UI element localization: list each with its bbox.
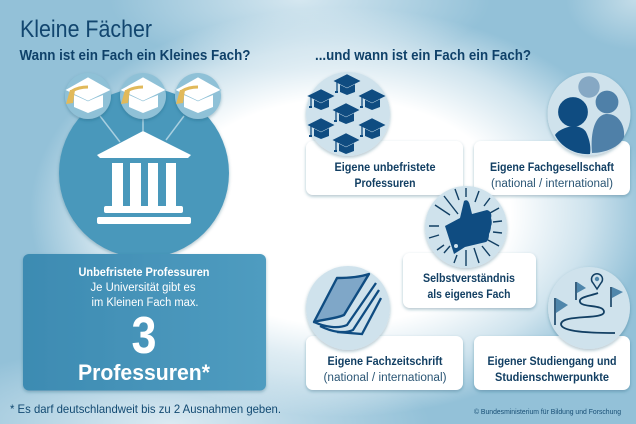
card: Eigene Fachgesellschaft	[474, 141, 630, 195]
card: Eigene Fachzeitschrift	[306, 336, 463, 390]
icon: university building	[97, 131, 191, 224]
icon: graduation cap 3	[175, 73, 221, 119]
panel: professorships box: Je Universität gibt es	[90, 282, 196, 294]
icon: thumbs up with rays	[425, 186, 507, 268]
heading: right question: ...und wann ist ein Fach ein Fach?	[315, 48, 531, 64]
footnote: * Es darf deutschlandweit bis zu 2 Ausnahmen geben.	[10, 402, 281, 416]
card: Selbstverständnis: Selbstverständnis	[423, 273, 515, 285]
copyright: © Bundesministerium für Bildung und Forschung	[474, 407, 621, 416]
icon: study path with flags	[548, 267, 630, 349]
icon: graduation cap 2	[120, 73, 166, 119]
card: Eigene unbefristete Professuren: Professuren	[354, 178, 416, 190]
card: Eigene unbefristete Professuren: Eigene unbefristete	[334, 162, 436, 174]
connector lines	[100, 116, 184, 142]
icon: group of people	[548, 72, 630, 156]
card: Eigene Fachzeitschrift: Eigene Fachzeitschrift	[328, 356, 443, 368]
icon: journal	[306, 266, 390, 350]
card: Selbstverständnis: als eigenes Fach	[428, 289, 510, 301]
heading: left question: Wann ist ein Fach ein Kleines Fach?	[20, 48, 251, 64]
card: Eigene unbefristete Professuren	[306, 141, 463, 195]
panel: professorships box: 3	[132, 307, 156, 365]
panel: professorships box: im Kleinen Fach max.	[92, 297, 198, 309]
icon: graduation cap 1	[65, 73, 111, 119]
panel: professorships box	[23, 254, 266, 390]
panel: professorships box: Professuren*	[78, 360, 210, 385]
card: Eigener Studiengang: Studienschwerpunkte	[495, 372, 609, 384]
card: Eigene Fachzeitschrift: (national / international)	[324, 372, 447, 384]
card: Eigener Studiengang: Eigener Studiengang und	[488, 356, 616, 368]
icon: many graduation caps	[306, 72, 390, 156]
card: Eigener Studiengang	[474, 336, 630, 390]
panel: professorships box: Unbefristete Professuren	[78, 267, 210, 279]
card: Eigene Fachgesellschaft: (national / international)	[491, 178, 613, 190]
panel: university circle	[59, 88, 229, 258]
title: Kleine Fächer	[20, 16, 152, 43]
card: Eigene Fachgesellschaft: Eigene Fachgesellschaft	[490, 162, 614, 174]
card: Selbstverständnis	[403, 253, 536, 308]
